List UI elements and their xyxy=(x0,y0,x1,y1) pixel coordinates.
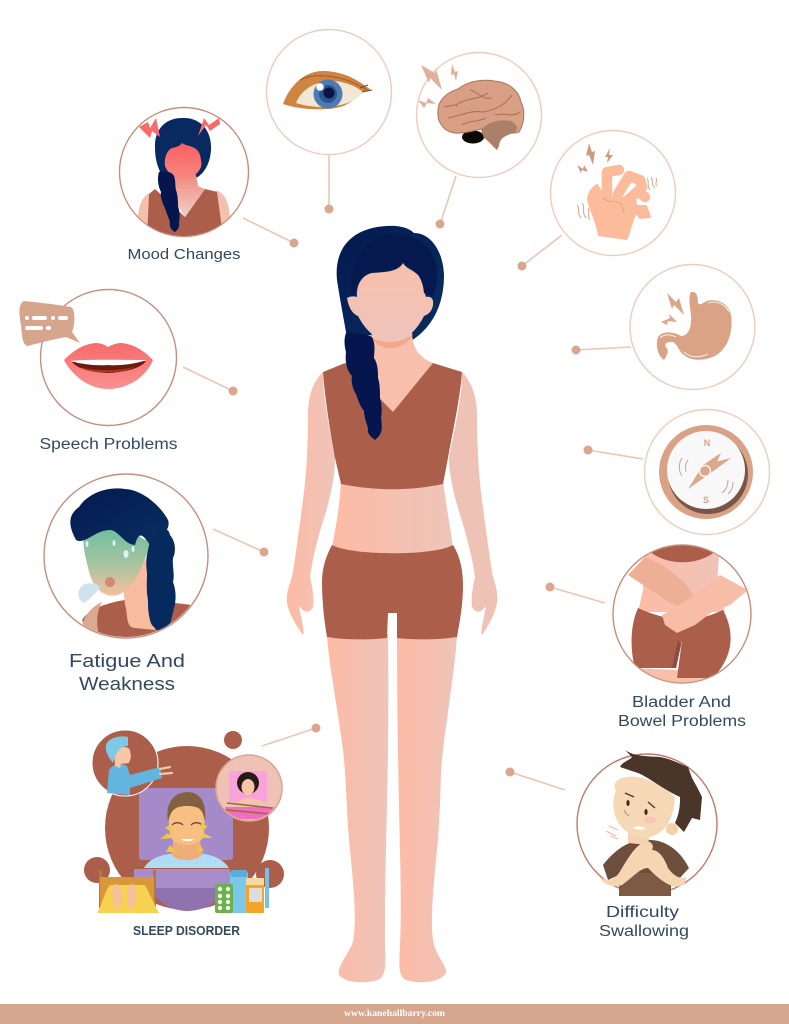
eye item xyxy=(266,30,392,214)
right arm xyxy=(449,372,497,635)
torso xyxy=(332,480,453,558)
compass item xyxy=(584,410,770,534)
blanket xyxy=(134,869,230,911)
sleep disorder item xyxy=(84,724,320,938)
icon: sweat drops xyxy=(86,540,134,558)
icon: bolts xyxy=(577,143,613,173)
difficulty swallowing item xyxy=(506,750,717,940)
crop top xyxy=(323,363,462,489)
label: Weakness xyxy=(79,673,175,694)
icon: compass: N xyxy=(704,438,710,448)
label: SLEEP DISORDER xyxy=(133,924,240,938)
fatigue and weakness item xyxy=(44,474,268,694)
chin shadow xyxy=(371,334,413,348)
circle frame xyxy=(613,545,751,683)
label: Fatigue And xyxy=(69,650,185,671)
connector line and dot xyxy=(546,582,605,603)
circle frame xyxy=(44,474,208,638)
circle frame xyxy=(120,108,248,236)
label: Difficulty xyxy=(606,904,679,921)
face xyxy=(347,263,433,344)
medicine xyxy=(215,868,269,913)
braid xyxy=(344,333,382,440)
icon: red bolts xyxy=(139,118,220,138)
hair back xyxy=(337,226,444,345)
pillow xyxy=(139,788,233,860)
circle frame xyxy=(40,290,176,426)
icon: speech bubble xyxy=(19,301,80,346)
icon: stomach xyxy=(657,292,732,360)
circle frame xyxy=(266,30,392,154)
footer bar xyxy=(0,1004,789,1024)
icon: brain xyxy=(438,80,524,150)
icon: clenched hand xyxy=(587,170,650,240)
icon: bolts xyxy=(418,64,458,108)
fringe xyxy=(351,234,437,297)
bladder and bowel problems item xyxy=(546,545,751,730)
neck and chest xyxy=(345,330,433,414)
label: Mood Changes xyxy=(128,246,240,263)
stomach item xyxy=(572,264,755,390)
circle frame xyxy=(577,754,717,894)
label: Swallowing xyxy=(599,923,689,940)
connector line and dot xyxy=(584,446,643,459)
circle frame xyxy=(644,410,770,534)
left arm xyxy=(287,372,335,635)
legs xyxy=(327,634,388,982)
woman vignette xyxy=(216,755,282,821)
circle frame xyxy=(630,264,755,390)
label: Bowel Problems xyxy=(618,713,746,730)
icon: eye xyxy=(283,71,372,109)
circle frame xyxy=(416,52,542,178)
central female figure xyxy=(287,226,497,982)
connector line and dot xyxy=(213,529,268,556)
label: Speech Problems xyxy=(40,436,178,453)
connector line and dot xyxy=(262,724,320,746)
sleeping man xyxy=(144,792,229,868)
connector line and dot xyxy=(183,367,238,396)
label xyxy=(599,904,689,940)
mood changes item xyxy=(120,108,298,263)
circle frame xyxy=(550,130,676,256)
icon: bolts xyxy=(661,293,684,325)
icon: girl with red face xyxy=(139,118,229,240)
icon: compass xyxy=(659,425,753,519)
connector line and dot xyxy=(572,346,631,354)
bed foot with feet xyxy=(97,870,159,913)
icon: boy holding throat xyxy=(600,750,702,896)
label xyxy=(618,694,746,730)
background blobs xyxy=(84,731,284,910)
brain item xyxy=(416,52,542,228)
doctor vignette xyxy=(92,730,172,796)
connector line and dot xyxy=(243,218,298,248)
footer url: www.kanehallbarry.com xyxy=(344,1009,445,1019)
icon: squiggles xyxy=(577,177,657,220)
icon: fatigued woman xyxy=(70,488,192,640)
icon: compass: S xyxy=(703,495,709,505)
shorts xyxy=(322,545,463,639)
label: Bladder And xyxy=(632,694,731,711)
connector line and dot xyxy=(436,176,456,228)
connector line and dot xyxy=(324,155,334,214)
connector line and dot xyxy=(506,768,565,790)
speech problems item xyxy=(19,290,238,453)
icon: lips xyxy=(64,343,153,389)
connector line xyxy=(518,235,562,270)
hand item xyxy=(518,130,676,270)
label xyxy=(69,650,185,694)
icon: torso holding abdomen xyxy=(628,545,748,690)
